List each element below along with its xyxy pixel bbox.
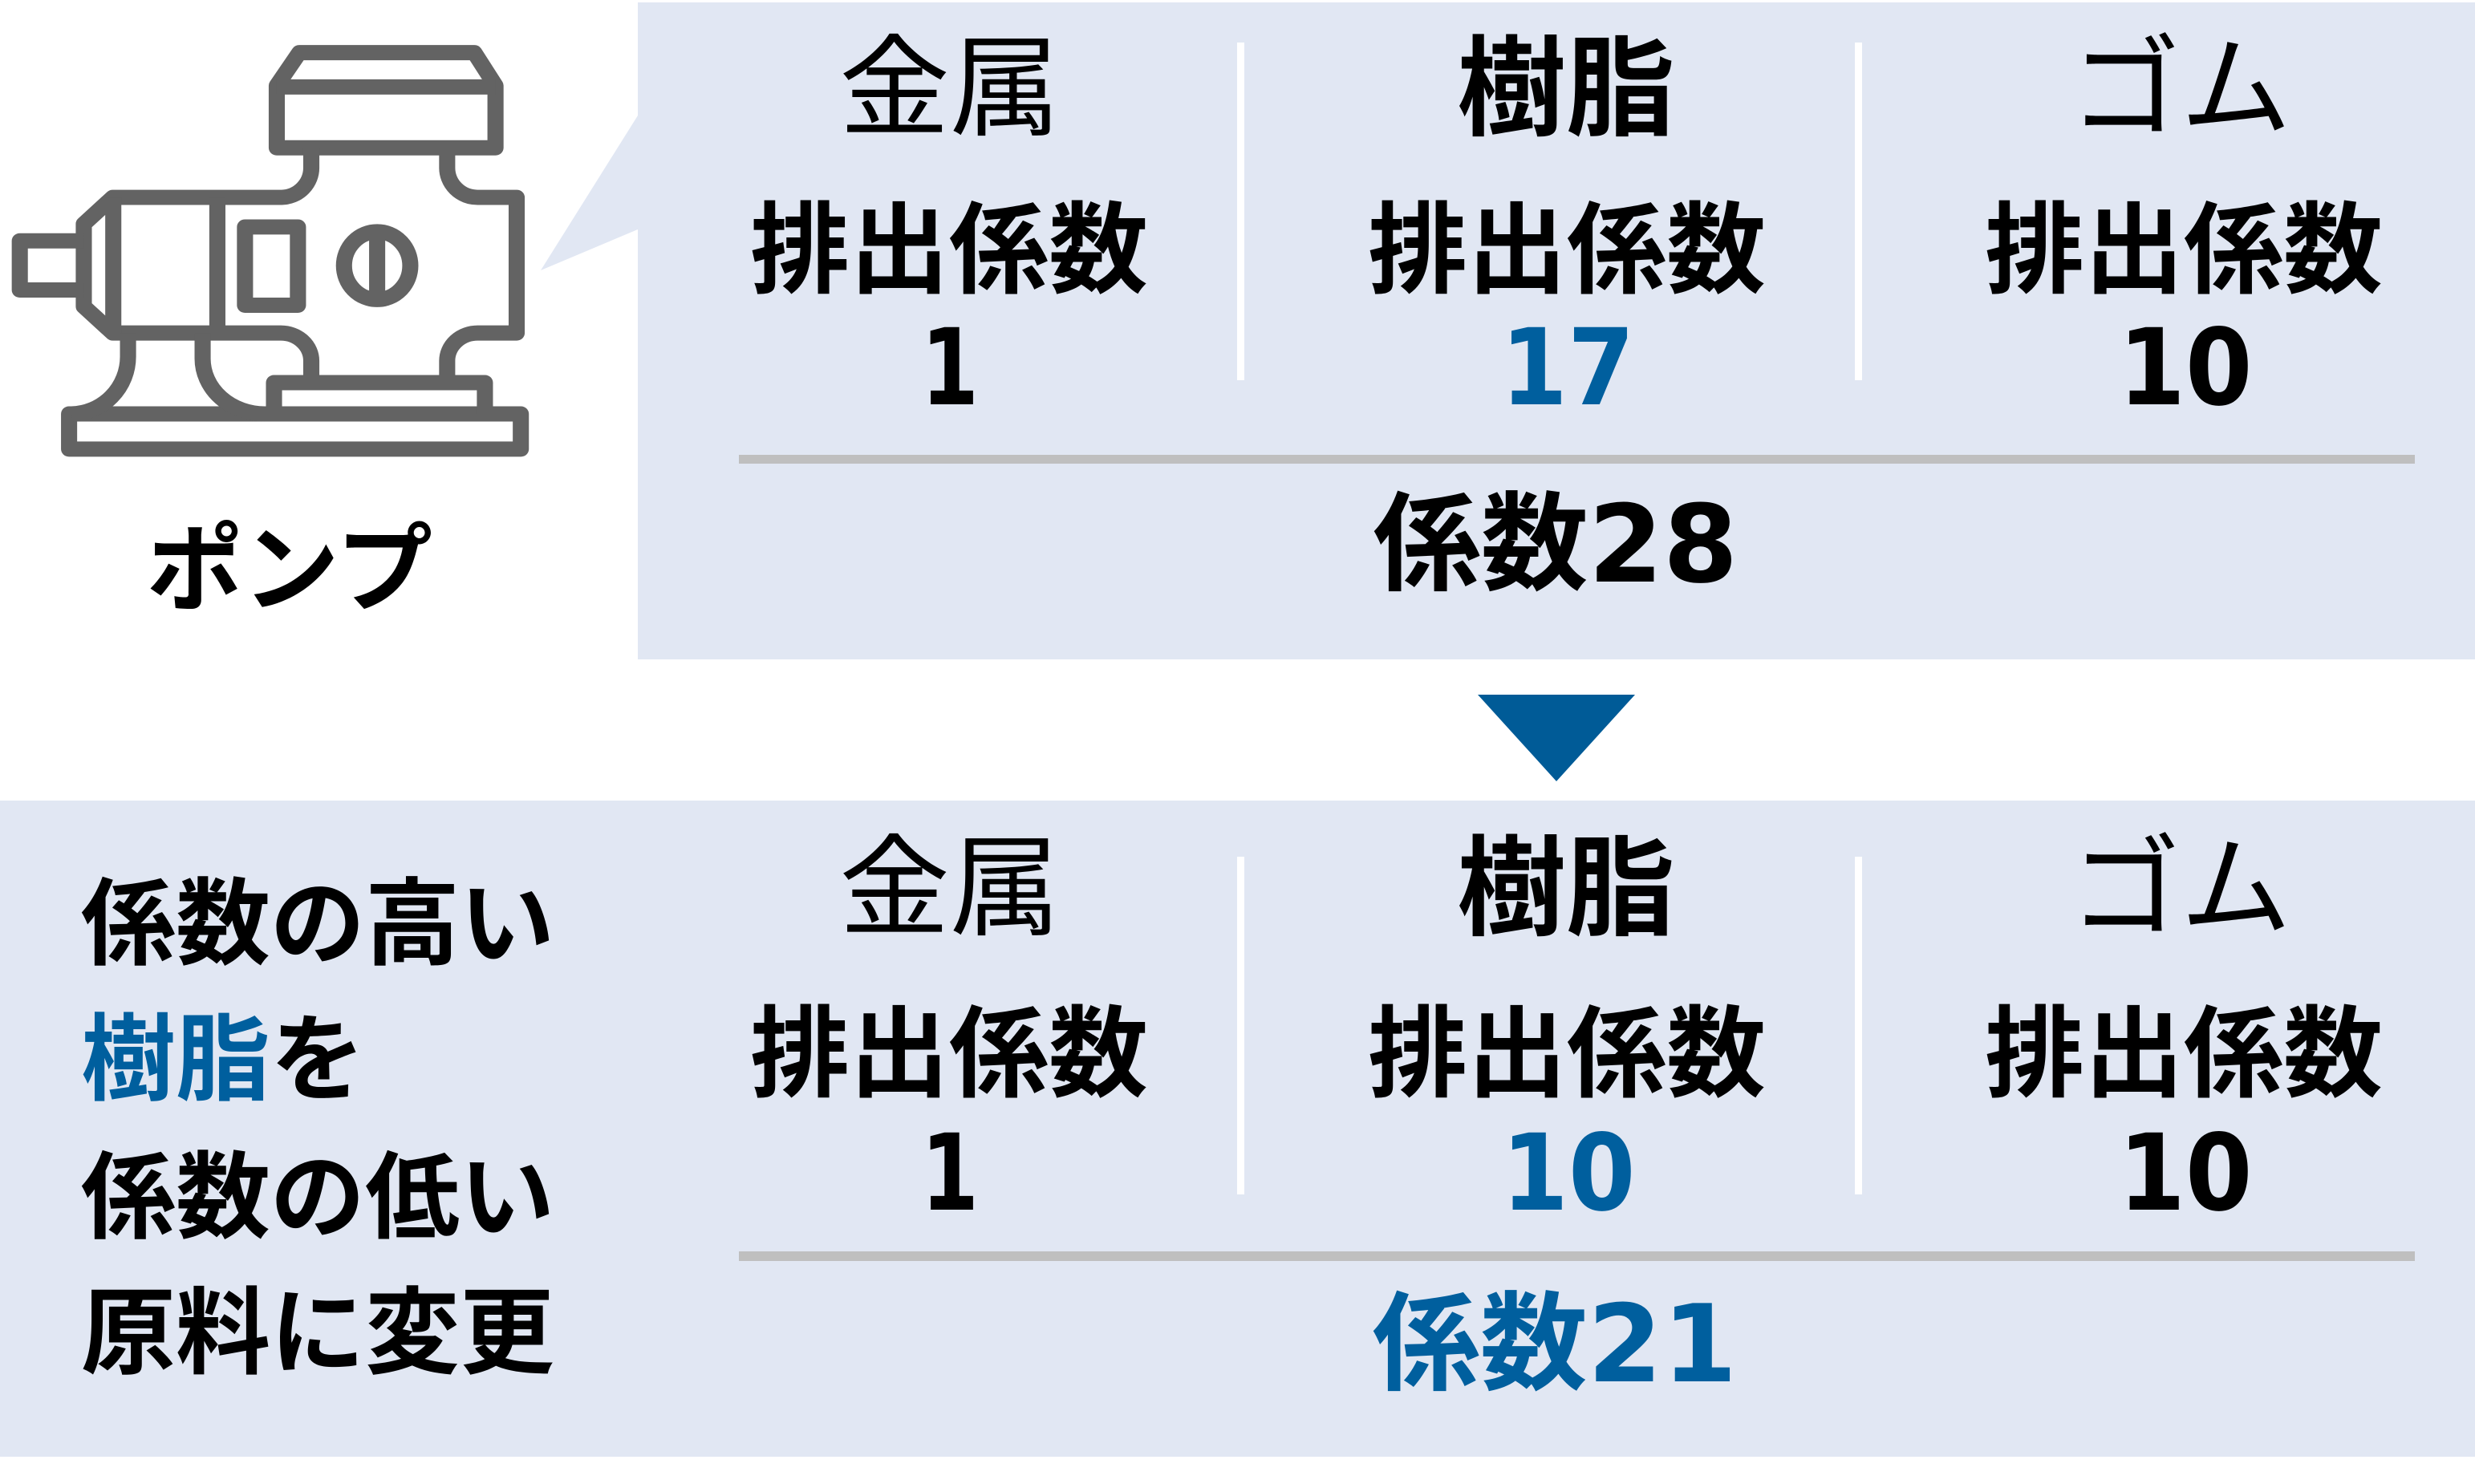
icon: pump — [20, 53, 521, 449]
column: metal — [750, 827, 1148, 1235]
arrow: down — [1478, 695, 1635, 781]
column: resin: 排出係数 — [1368, 999, 1766, 1110]
column: metal: 1 — [921, 1112, 979, 1235]
column: rubber: ゴム — [2070, 827, 2291, 951]
column: metal: 金属 — [839, 827, 1061, 951]
column: rubber — [1985, 27, 2383, 430]
text: explanation: 原料に変更 — [81, 1281, 554, 1387]
column: metal: 金属 — [839, 27, 1061, 151]
column: metal: 排出係数 — [750, 999, 1148, 1110]
text: explanation: 係数の高い — [81, 872, 554, 978]
column: resin — [1368, 828, 1766, 1235]
column: rubber: 10 — [2118, 306, 2253, 430]
column: resin: 17 — [1500, 306, 1635, 430]
column: rubber: 10 — [2118, 1112, 2253, 1235]
column: rubber: ゴム — [2070, 27, 2291, 151]
column: resin — [1368, 28, 1766, 430]
label: pump: ポンプ — [147, 517, 432, 624]
total: coefficient 21: 係数21 — [1373, 1282, 1737, 1407]
column: resin: 樹脂 — [1457, 828, 1675, 950]
panel: after change — [0, 801, 2475, 1457]
column: rubber: 排出係数 — [1985, 196, 2383, 306]
column: rubber — [1985, 827, 2383, 1235]
column: metal: 1 — [921, 306, 979, 430]
text: explanation — [81, 872, 554, 1387]
column: metal: 排出係数 — [750, 196, 1148, 306]
column: resin: 10 — [1502, 1112, 1635, 1235]
total: coefficient 28: 係数28 — [1373, 482, 1738, 607]
column: resin: 樹脂 — [1457, 28, 1675, 150]
text: explanation: 樹脂を — [81, 1008, 365, 1113]
panel: current pump coefficients — [541, 2, 2475, 659]
column: metal — [750, 27, 1148, 430]
column: rubber: 排出係数 — [1985, 999, 2383, 1110]
text: explanation: 係数の低い — [81, 1145, 554, 1251]
column: resin: 排出係数 — [1368, 196, 1766, 306]
